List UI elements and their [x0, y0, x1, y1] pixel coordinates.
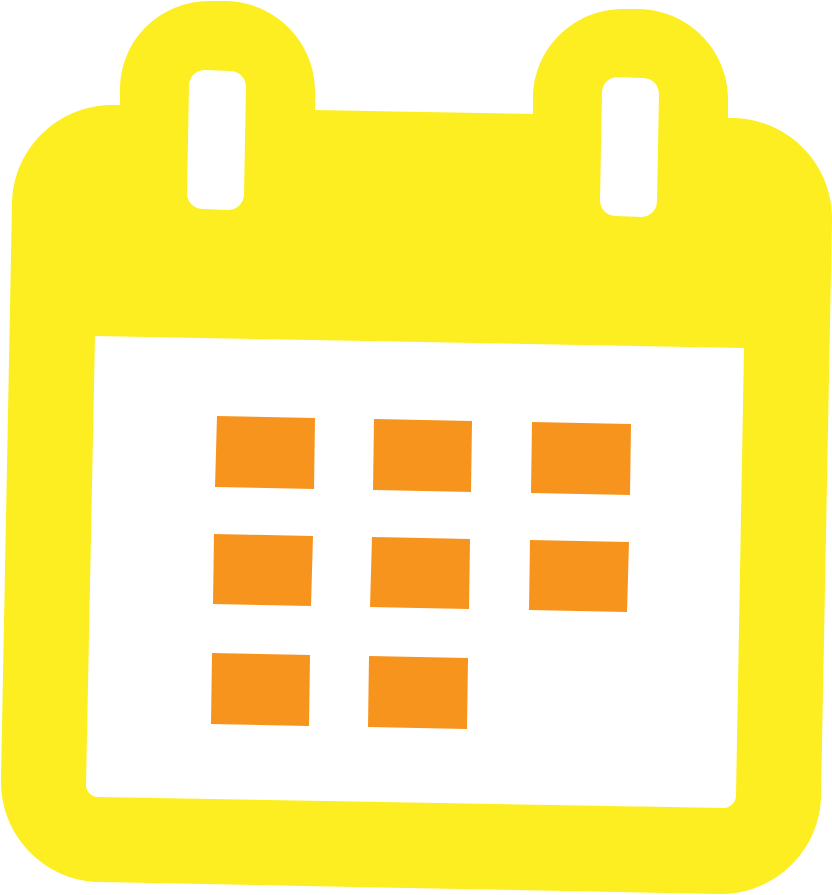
white date panel: [86, 336, 744, 808]
date squares: [211, 416, 631, 729]
